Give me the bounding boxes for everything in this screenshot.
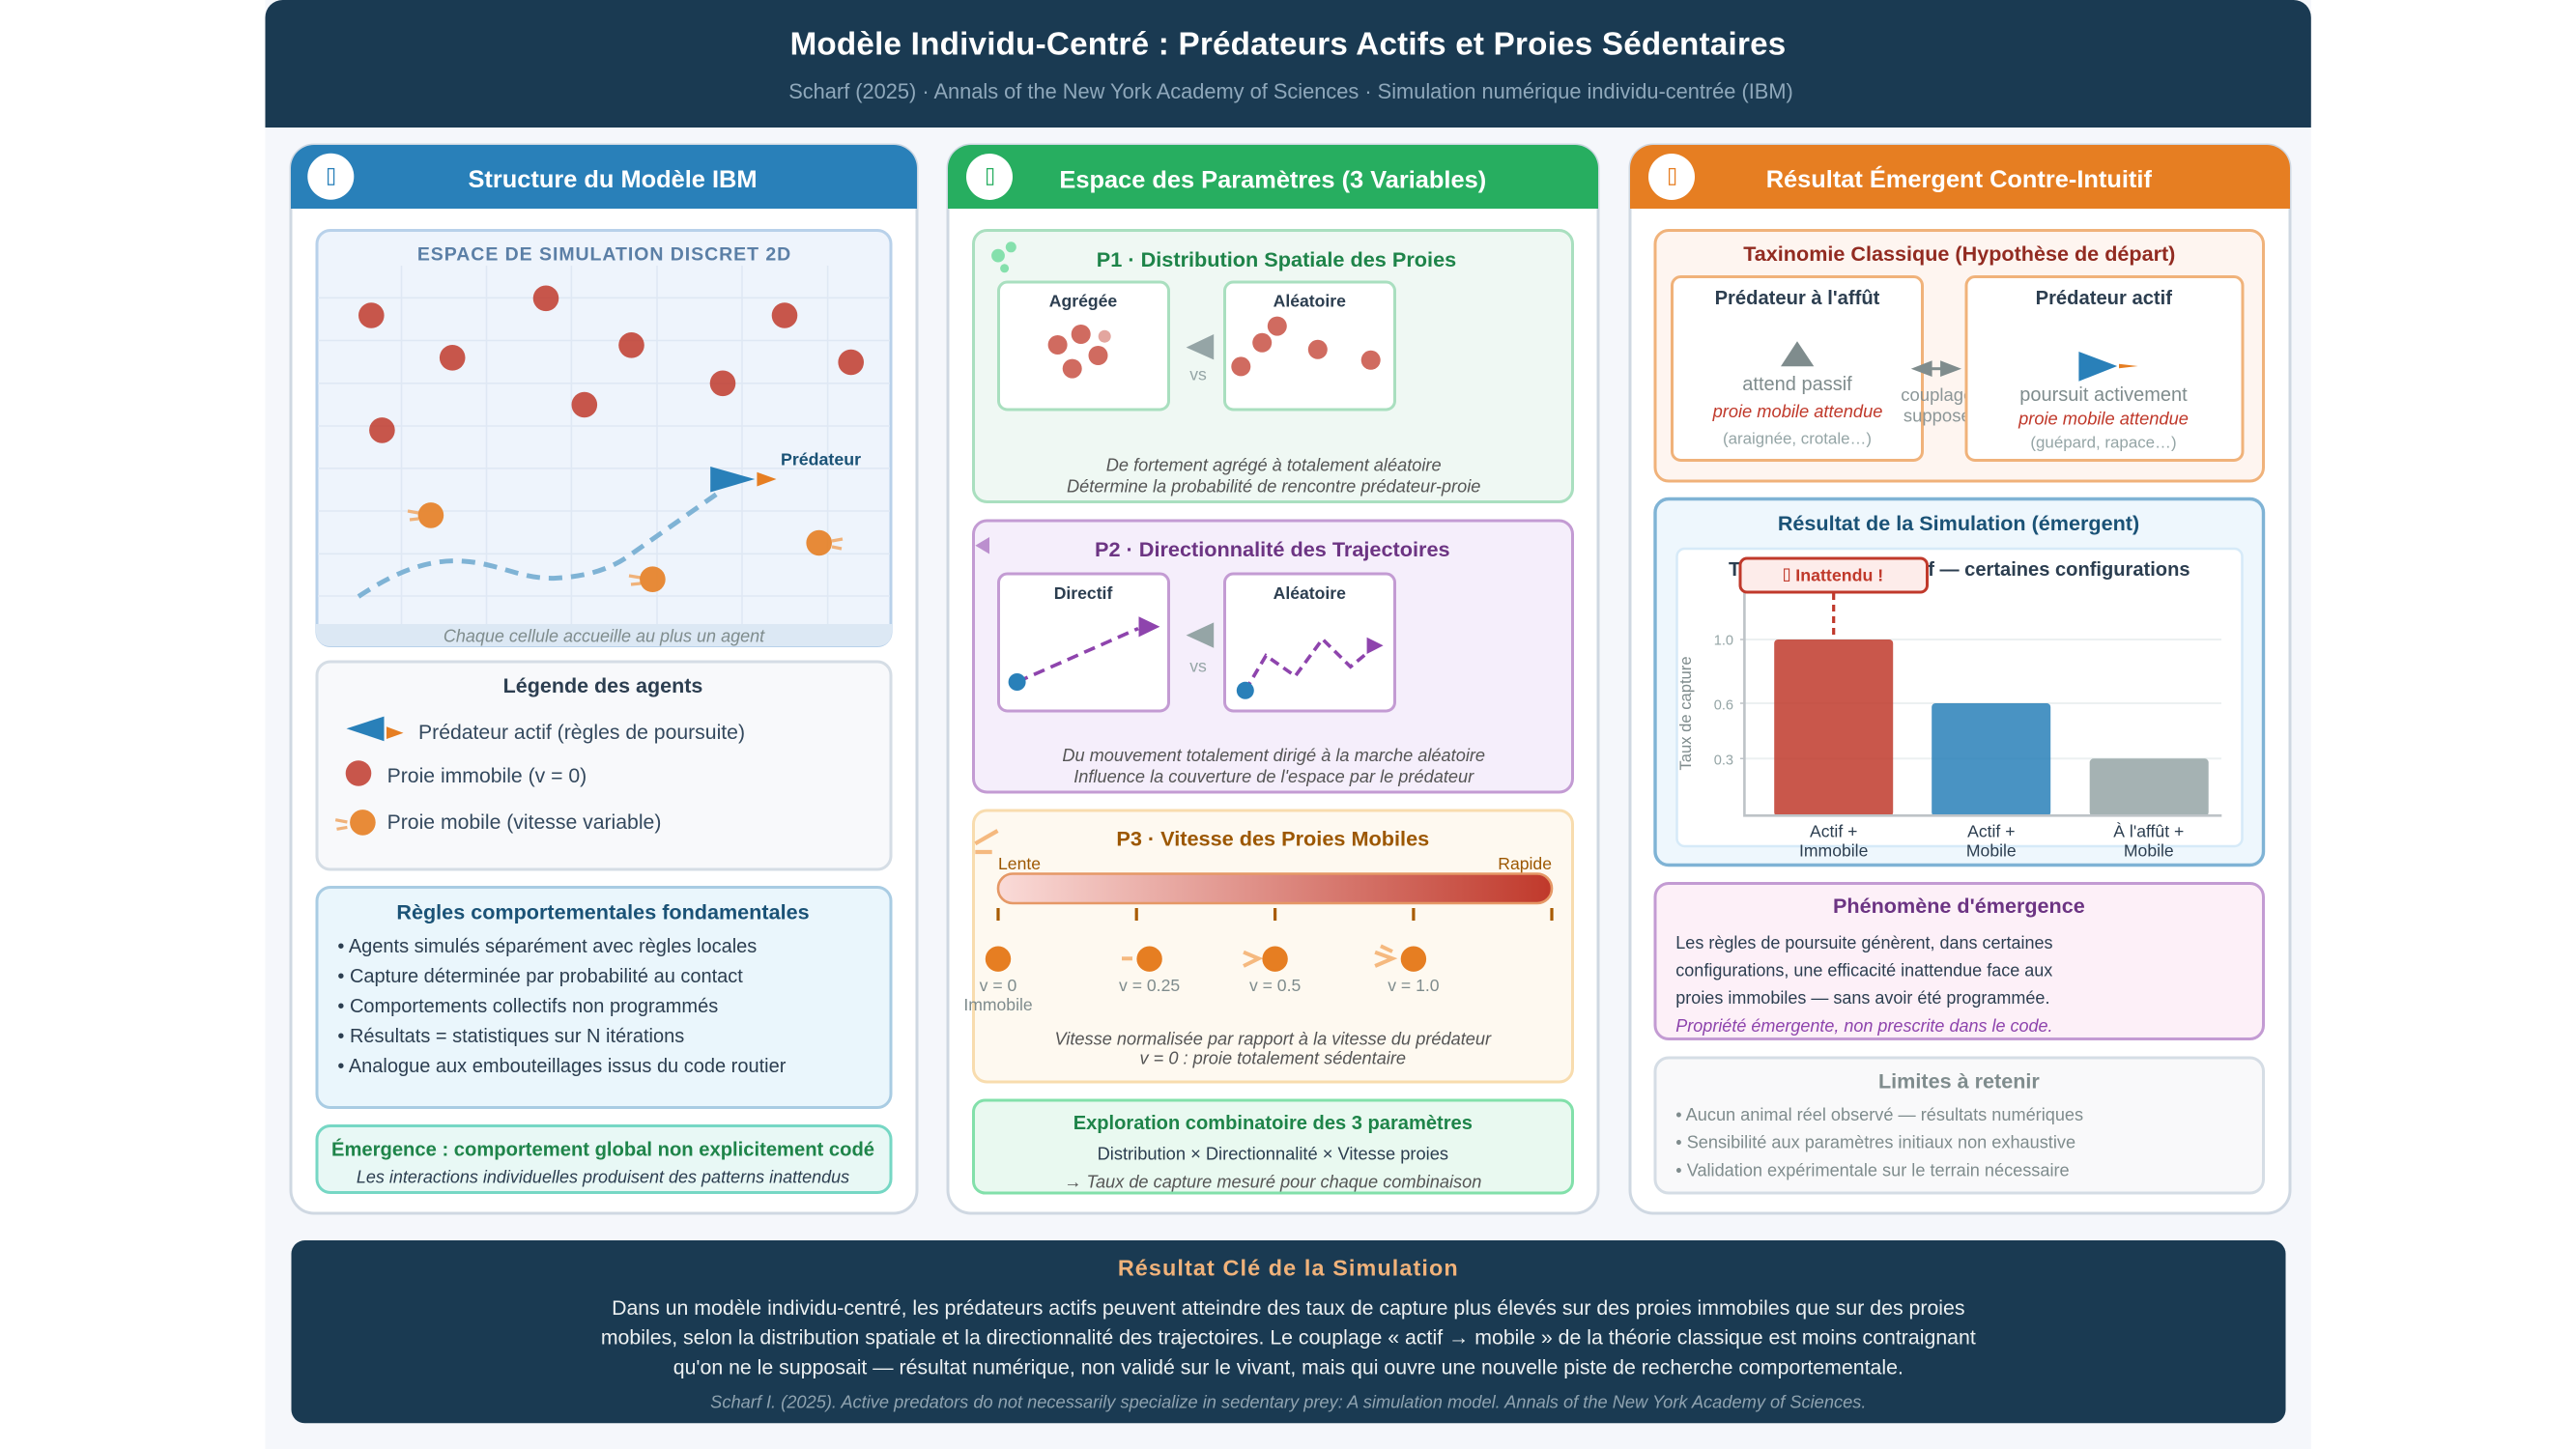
limits list: • Sensibilité aux paramètres initiaux non exhaustive: [1675, 1133, 2075, 1152]
active predator card: Prédateur actif: [2036, 288, 2172, 309]
coupling label: [1901, 384, 1973, 426]
rules list: • Capture déterminée par probabilité au contact: [337, 966, 743, 987]
limits: Limites à retenir: [1878, 1069, 2040, 1094]
emergence text: Propriété émergente, non prescrite dans le code.: [1675, 1016, 2053, 1036]
legend of agents: Légende des agents: [503, 674, 702, 697]
combinatorial exploration: → Taux de capture mesuré pour chaque combinaison: [1064, 1172, 1481, 1191]
emergence phenomenon: [1655, 883, 2263, 1039]
panel: structure du modèle IBM: [291, 145, 917, 1213]
rules list: • Résultats = statistiques sur N itérations: [337, 1026, 684, 1047]
key result banner: Résultat Clé de la Simulation: [1118, 1256, 1459, 1281]
speed v=0: Immobile: [963, 995, 1033, 1014]
key result text: [601, 1296, 1976, 1378]
combinatorial exploration: Distribution × Directionnalité × Vitesse proies: [1098, 1144, 1448, 1164]
panel heading: structure: [291, 145, 917, 209]
x labels: À l'affût +: [2113, 822, 2184, 841]
coupling label: couplage: [1901, 384, 1973, 405]
bar chart: [1676, 549, 2242, 861]
aggregated distribution: Agrégée: [1049, 291, 1117, 310]
classical taxonomy: [1655, 230, 2263, 481]
vs arrow: vs: [1189, 657, 1207, 676]
ambush predator card: proie mobile attendue: [1712, 401, 1882, 421]
immobile prey: [358, 286, 864, 443]
emergence text: [1675, 933, 2053, 1036]
parameter P3: prey speed: P3 · Vitesse des Proies Mobiles: [1116, 827, 1429, 850]
directional trajectory: [999, 574, 1169, 711]
legend: predator: [346, 717, 745, 744]
speed v=1.0: [1375, 946, 1440, 995]
limits list: • Aucun animal réel observé — résultats numériques: [1675, 1105, 2083, 1124]
parameter P1: spatial distribution: P1 · Distribution Spatiale des Proies: [1097, 247, 1456, 271]
random trajectory: [1225, 574, 1395, 711]
x labels: Immobile: [1799, 841, 1868, 861]
speed v=0.25: v = 0.25: [1119, 976, 1180, 995]
mobile prey: [408, 502, 843, 592]
icon: P1 cluster: [991, 242, 1016, 272]
P2 description: Influence la couverture de l'espace par le prédateur: [1073, 767, 1474, 786]
legend: predator: Prédateur actif (règles de poursuite): [418, 722, 745, 744]
vs arrow: vs: [1189, 365, 1207, 384]
simulation caption: Chaque cellule accueille au plus un agent: [444, 626, 765, 645]
simulation heading: ESPACE DE SIMULATION DISCRET 2D: [417, 243, 791, 265]
rules list: [337, 936, 787, 1077]
icon: P2 direction: [975, 537, 989, 554]
x labels: Actif +: [1967, 822, 2015, 841]
key result text: mobiles, selon la distribution spatiale et la directionnalité des trajectoires. Le couplage « actif → mobile » de la théorie classique est moins contraignant: [601, 1326, 1976, 1350]
key result banner: [292, 1240, 2286, 1423]
emergence callout: Émergence : comportement global non explicitement codé: [331, 1138, 874, 1161]
axes: [1744, 592, 2221, 815]
y tick labels: 1.0: [1714, 634, 1733, 649]
ambush predator card: attend passif: [1742, 374, 1852, 395]
header band: [265, 0, 2311, 128]
rules list: • Agents simulés séparément avec règles locales: [337, 936, 757, 957]
key result text: qu'on ne le supposait — résultat numérique, non validé sur le vivant, mais qui ouvre une nouvelle piste de recherche comportementale.: [673, 1355, 1903, 1378]
simulation result: Résultat de la Simulation (émergent): [1778, 511, 2139, 535]
parameter P3: prey speed: [963, 810, 1573, 1082]
P3 description: [1055, 1030, 1492, 1068]
page background: [265, 0, 2311, 1449]
panel heading: résultat: [1630, 145, 2290, 209]
predator trajectory: [358, 490, 723, 597]
speed scale labels: Rapide: [1498, 854, 1552, 873]
speed scale labels: [998, 854, 1552, 873]
panel heading: paramètres: Espace des Paramètres (3 Variables): [1059, 166, 1486, 193]
icon: P3 speed: [975, 831, 997, 852]
P3 description: Vitesse normalisée par rapport à la vitesse du prédateur: [1055, 1030, 1492, 1049]
simulation caption: [316, 624, 892, 646]
speed v=0.5: v = 0.5: [1249, 976, 1301, 995]
active predator card: proie mobile attendue: [2018, 408, 2189, 428]
simulation result: [1655, 498, 2263, 866]
speed v=0: [963, 947, 1033, 1014]
limits: [1655, 1058, 2263, 1193]
ambush predator card: [1672, 276, 1923, 460]
emergence callout: Les interactions individuelles produisent des patterns inattendus: [357, 1167, 849, 1186]
legend: mobile prey: Proie mobile (vitesse variable): [387, 811, 661, 834]
vs arrow: [1187, 334, 1214, 384]
emergence text: Les règles de poursuite génèrent, dans certaines: [1675, 933, 2053, 952]
P1 description: [1067, 456, 1480, 497]
speed scale labels: Lente: [998, 854, 1041, 873]
predator agent: [710, 467, 777, 493]
x labels: Actif +: [1810, 822, 1857, 841]
panel heading: paramètres: [948, 145, 1598, 209]
emergence text: configurations, une efficacité inattendue face aux: [1675, 960, 2052, 980]
limits list: [1675, 1105, 2083, 1180]
callout: inattendu: Inattendu !: [1795, 566, 1883, 585]
x labels: [1799, 822, 2184, 861]
bars: [1774, 639, 2209, 816]
emergence text: proies immobiles — sans avoir été programmée.: [1675, 988, 2049, 1008]
panel: résultat émergent: [1630, 145, 2290, 1213]
icon: paramètres: [966, 154, 1013, 200]
rules list: • Analogue aux embouteillages issus du code routier: [337, 1056, 787, 1077]
speed v=1.0: v = 1.0: [1388, 976, 1440, 995]
combinatorial exploration: [974, 1100, 1573, 1193]
bar chart: Taux de capture relatif — certaines configurations: [1729, 559, 2190, 581]
callout: inattendu: [1740, 558, 1927, 639]
y tick labels: 0.3: [1714, 753, 1733, 769]
limits list: • Validation expérimentale sur le terrain nécessaire: [1675, 1161, 2070, 1180]
panel heading: structure: Structure du Modèle IBM: [468, 166, 758, 193]
icon: structure: [307, 154, 354, 200]
speed v=0.25: [1119, 947, 1180, 995]
panel: espace des paramètres: [948, 145, 1598, 1213]
active predator card: [1966, 276, 2243, 460]
y tick labels: 0.6: [1714, 697, 1733, 713]
legend of agents: [317, 662, 891, 869]
speed v=0: v = 0: [980, 976, 1017, 995]
subtitle: Scharf (2025) · Annals of the New York Academy of Sciences · Simulation numérique individu-centrée (IBM): [788, 79, 1793, 103]
icon: résultat: [1648, 154, 1695, 200]
vs arrow: [1187, 622, 1214, 676]
speed v=0.5: [1244, 947, 1301, 995]
x labels: Mobile: [2124, 841, 2174, 861]
legend: immobile prey: [346, 760, 587, 787]
aggregated distribution: [999, 282, 1169, 410]
emergence callout: [317, 1126, 891, 1192]
random trajectory: Aléatoire: [1274, 583, 1346, 603]
ambush predator card: Prédateur à l'affût: [1715, 288, 1880, 309]
P1 description: Détermine la probabilité de rencontre prédateur-proie: [1067, 477, 1480, 497]
emergence phenomenon: Phénomène d'émergence: [1833, 894, 2085, 918]
P1 description: De fortement agrégé à totalement aléatoire: [1106, 456, 1442, 475]
predator label: Prédateur: [781, 450, 861, 469]
speed ticks: [998, 908, 1552, 921]
citation: Scharf I. (2025). Active predators do not necessarily specialize in sedentary prey: A simulation model. Annals of the New York Academy of Sciences.: [710, 1391, 1866, 1411]
active predator card: (guépard, rapace…): [2030, 433, 2177, 451]
coupling label: supposé: [1903, 406, 1971, 426]
title: Modèle Individu-Centré : Prédateurs Actifs et Proies Sédentaires: [790, 27, 1786, 62]
random distribution: Aléatoire: [1274, 291, 1346, 310]
key result text: Dans un modèle individu-centré, les prédateurs actifs peuvent atteindre des taux de capture plus élevés sur des proies immobiles que sur des proies: [612, 1296, 1965, 1320]
directional trajectory: Directif: [1054, 583, 1112, 603]
combinatorial exploration: Exploration combinatoire des 3 paramètres: [1073, 1113, 1473, 1134]
legend: immobile prey: Proie immobile (v = 0): [387, 765, 587, 787]
random distribution: [1225, 282, 1395, 410]
x labels: Mobile: [1966, 841, 2017, 861]
P3 description: v = 0 : proie totalement sédentaire: [1140, 1049, 1406, 1068]
simulation space: [316, 230, 892, 646]
coupling arrow: [1911, 360, 1961, 377]
parameter P1: spatial distribution: [974, 230, 1573, 502]
ambush predator card: (araignée, crotale…): [1723, 429, 1872, 447]
parameter P2: trajectory directionality: [974, 521, 1573, 792]
P2 description: Du mouvement totalement dirigé à la marche aléatoire: [1062, 746, 1485, 765]
behavioural rules: Règles comportementales fondamentales: [396, 900, 810, 923]
speed gradient bar: [998, 873, 1552, 903]
P2 description: [1062, 746, 1485, 786]
parameter P2: trajectory directionality: P2 · Directionnalité des Trajectoires: [1095, 537, 1450, 561]
active predator card: poursuit activement: [2019, 384, 2188, 406]
panel heading: résultat: Résultat Émergent Contre-Intuitif: [1766, 165, 2152, 193]
y tick labels: [1714, 634, 1733, 769]
classical taxonomy: Taxinomie Classique (Hypothèse de départ): [1743, 242, 2175, 266]
y axis label: Taux de capture: [1676, 656, 1695, 771]
behavioural rules: [317, 887, 891, 1107]
rules list: • Comportements collectifs non programmés: [337, 996, 718, 1017]
